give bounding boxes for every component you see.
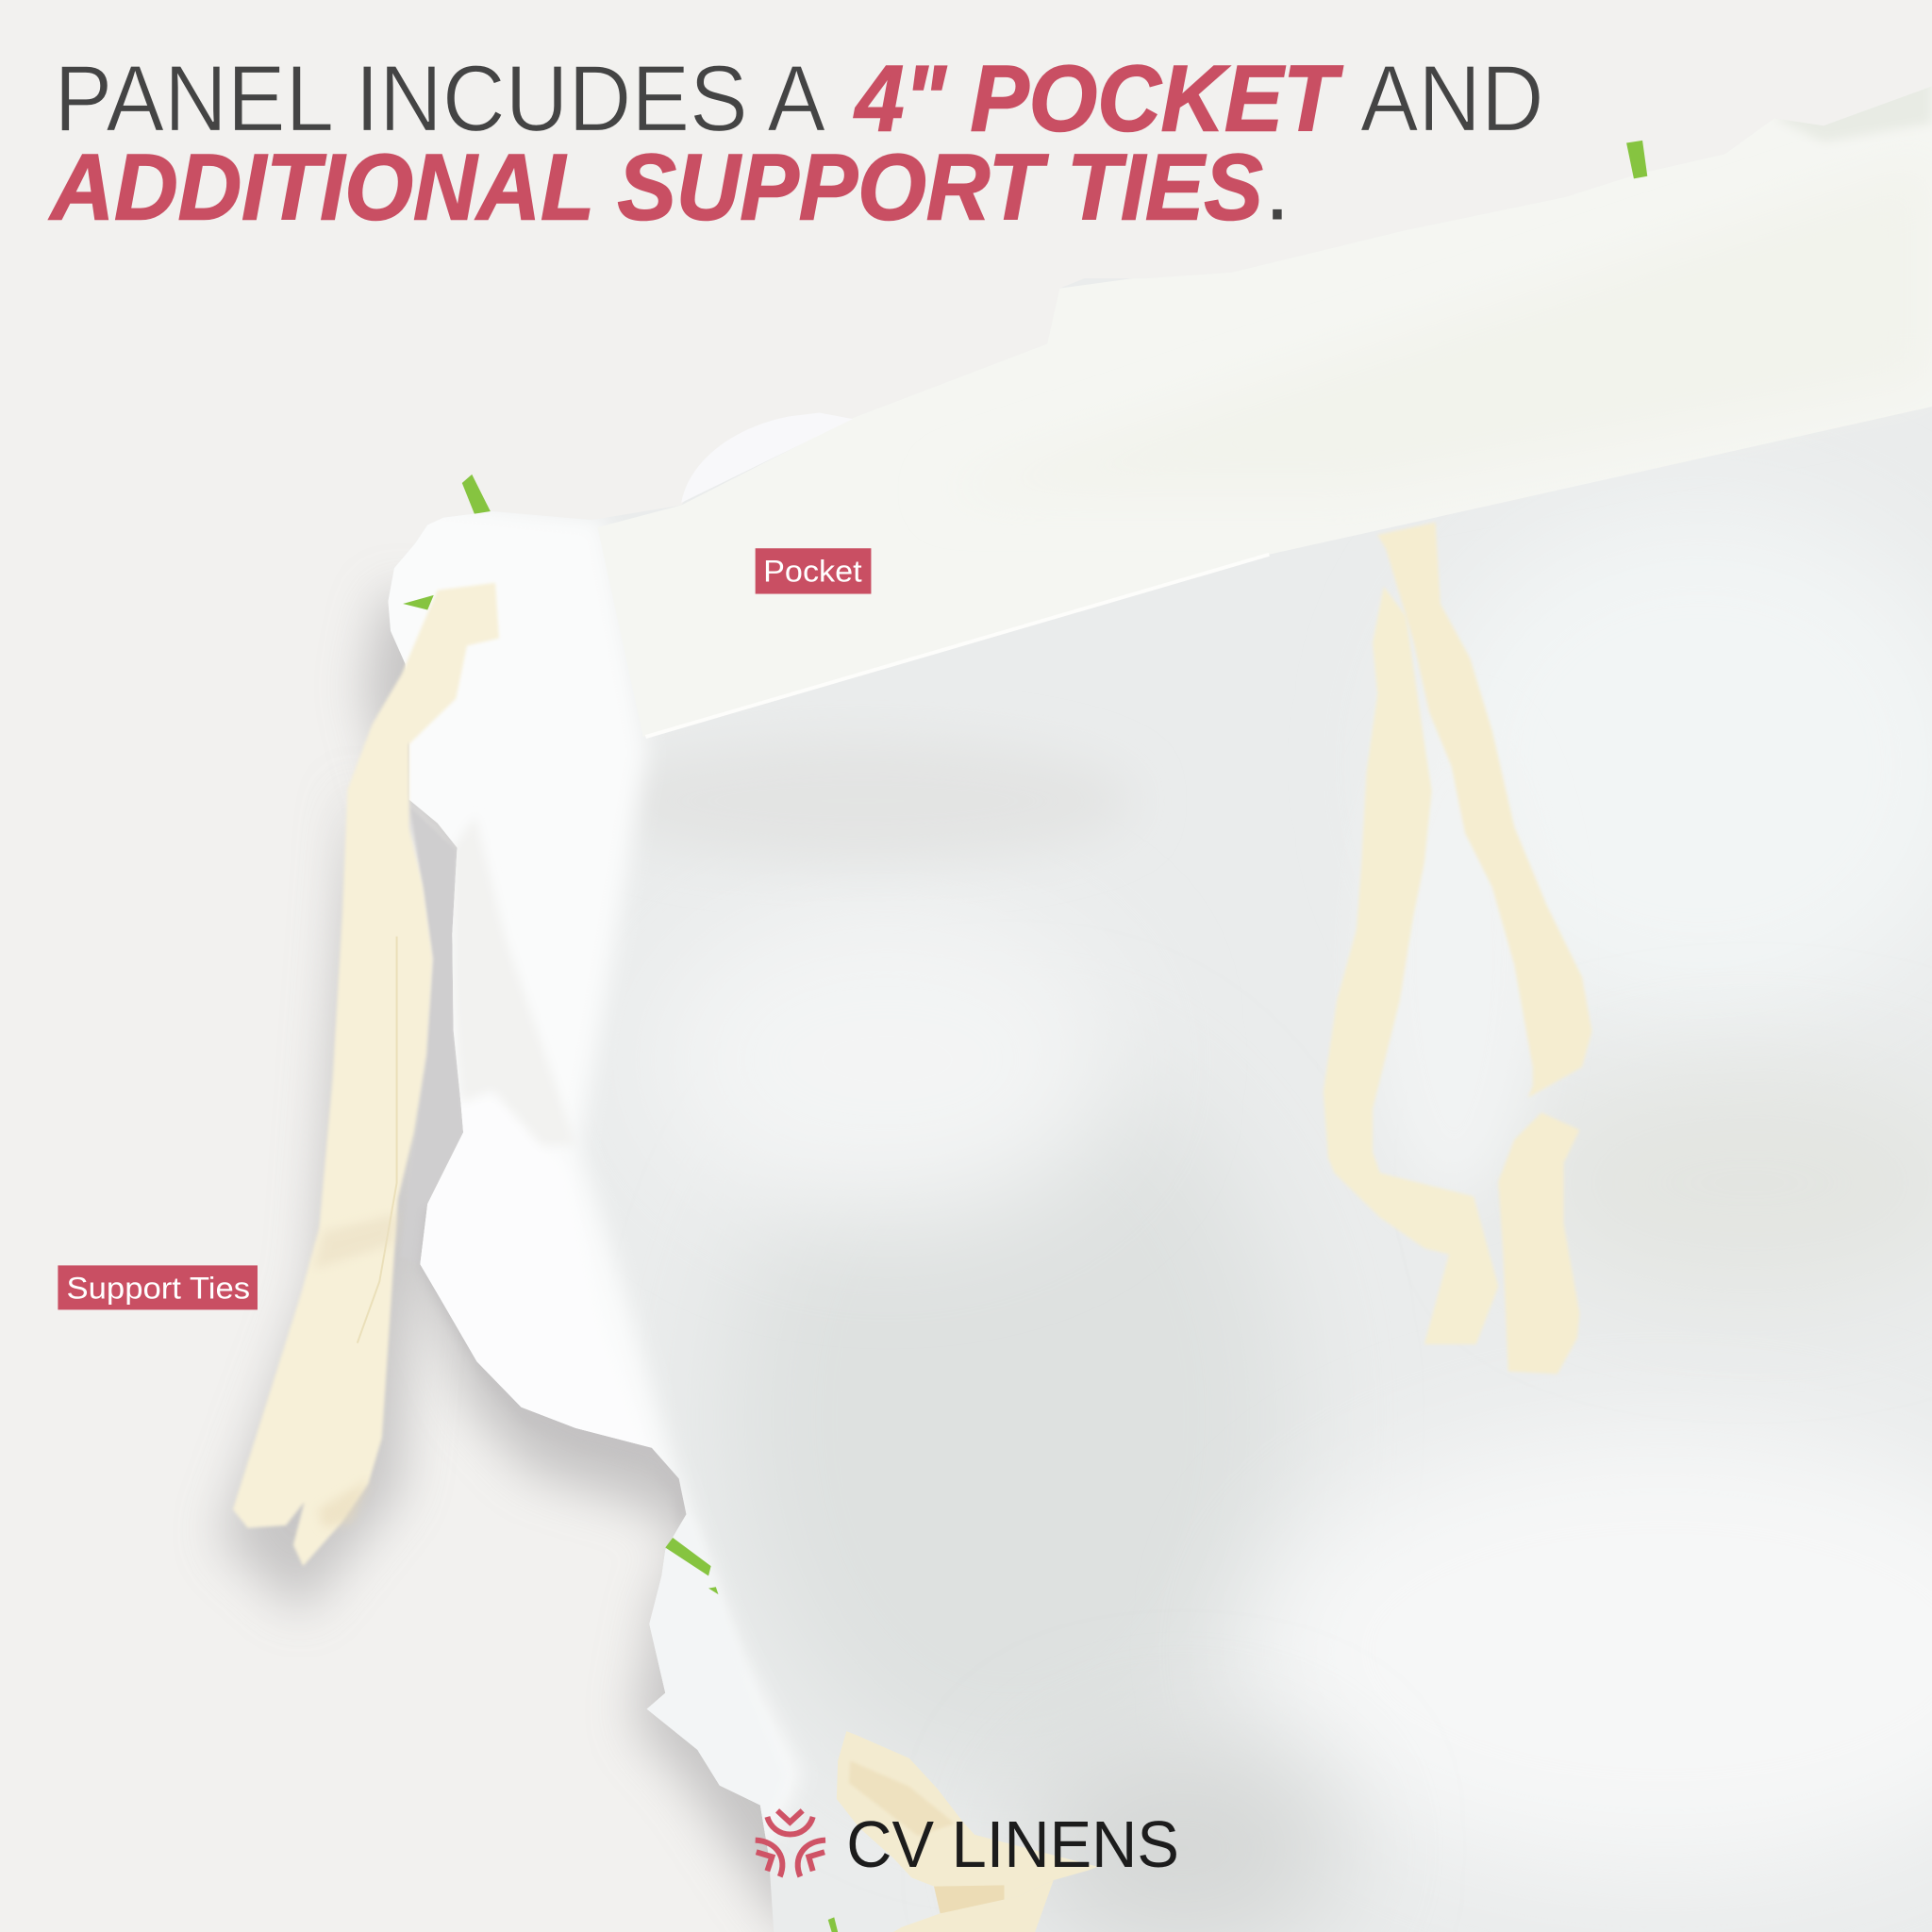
right support tie [1324,523,1592,1374]
title line 1: PANEL INCUDES A [54,46,825,151]
pocket flap white corner [681,413,853,503]
green tabs [403,141,1647,1932]
title [48,46,1544,240]
title line 1: AND [1360,46,1544,151]
title line 2: ADDITIONAL SUPPORT TIES [48,135,1263,240]
garment cast shadows [219,591,937,1932]
frill and left white edge [370,492,801,1848]
title line 1: 4" POCKET [854,46,1343,151]
title line 1 [54,46,1544,151]
label: support ties: Support Ties [67,1271,250,1306]
wordmark: CV LINENS [846,1807,1179,1881]
label: support ties [58,1265,258,1309]
panel body [370,74,1932,1932]
pocket band [597,74,1932,737]
bottom tie [837,1731,1098,1932]
title line 2: . [1264,135,1291,240]
icon: CV Linens mark [756,1810,825,1876]
label: pocket: Pocket [763,553,862,588]
label: pocket [756,548,871,594]
logo [756,1807,1179,1881]
soft fabric shading [666,578,1932,1932]
left support tie [233,583,499,1566]
